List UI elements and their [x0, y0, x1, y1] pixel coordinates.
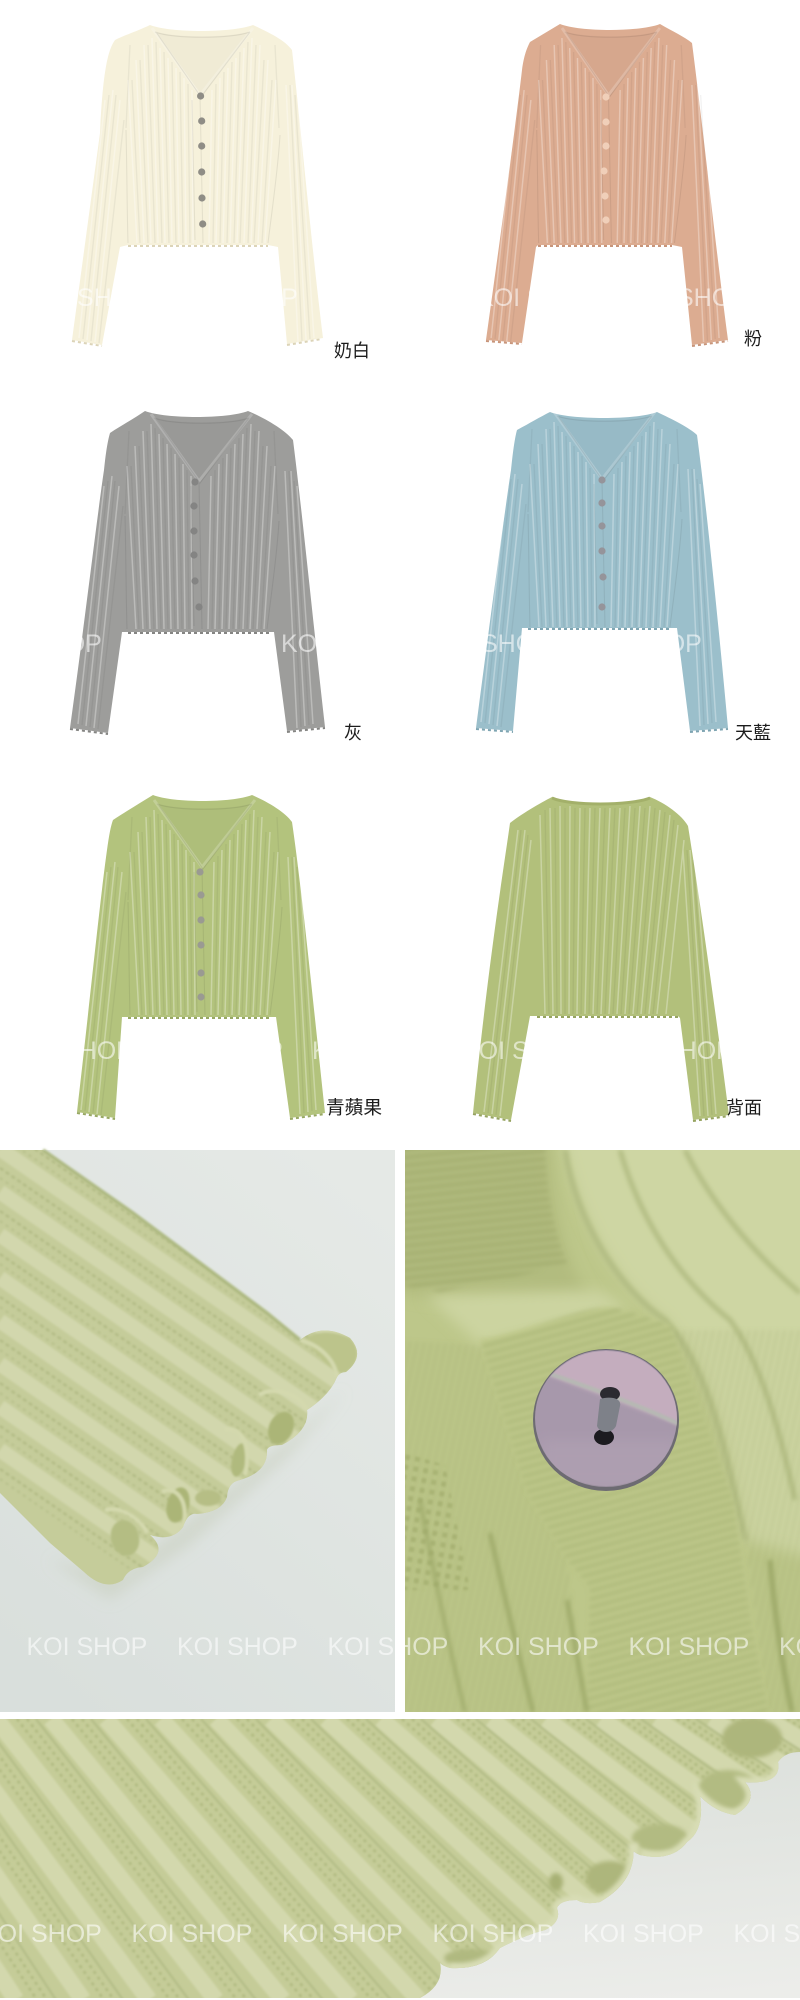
watermark: KOI SHOP rows: KOI SHOP — [612, 1037, 733, 1065]
watermark: KOI SHOP rows: KOI SHOP — [281, 630, 402, 658]
watermark: KOI SHOP rows: KOI SHOP — [282, 1920, 403, 1948]
watermark: KOI SHOP rows: KOI SHOP — [628, 1633, 749, 1661]
watermark: KOI SHOP rows: KOI SHOP — [312, 1037, 433, 1065]
watermark: KOI SHOP rows: KOI SHOP — [27, 284, 148, 312]
cardigan: sky blue — [476, 412, 728, 732]
color label: grey: 灰 — [344, 723, 362, 743]
watermark: KOI SHOP rows: KOI SHOP — [26, 1633, 147, 1661]
watermark: KOI SHOP rows: KOI SHOP — [432, 1920, 553, 1948]
watermark: KOI SHOP rows: KOI SHOP — [132, 1920, 252, 1948]
photo: sleeve cuff detail — [0, 1148, 395, 1712]
photo: button close-up — [385, 1130, 800, 1720]
cardigan: pink — [486, 24, 728, 346]
cardigan: apple green front — [77, 795, 325, 1119]
icon: shirt button — [533, 1340, 685, 1491]
color label: apple green: 青蘋果 — [326, 1097, 382, 1118]
watermark: KOI SHOP rows: KOI SHOP — [12, 1037, 133, 1065]
watermark: KOI SHOP rows: KOI SHOP — [327, 284, 448, 312]
watermark: KOI SHOP rows: KOI SHOP — [177, 284, 298, 312]
color label: back view: 背面 — [726, 1098, 762, 1118]
cuff ruffles — [105, 1332, 357, 1559]
cardigan: grey — [70, 411, 325, 734]
color label: cream: 奶白 — [334, 341, 370, 361]
watermark: KOI SHOP rows: KOI SHOP — [162, 1037, 283, 1065]
watermark: KOI SHOP rows: KOI SHOP — [177, 1633, 298, 1661]
watermark: KOI SHOP rows: KOI SHOP — [477, 284, 598, 312]
watermark: KOI SHOP rows: KOI SHOP — [627, 284, 748, 312]
watermark: KOI SHOP rows: KOI SHOP — [478, 1633, 599, 1661]
watermark: KOI SHOP rows: KOI SHOP — [431, 630, 552, 658]
cardigan: apple green back — [473, 797, 729, 1121]
watermark: KOI SHOP rows: KOI SHOP — [583, 1920, 704, 1948]
watermark: KOI SHOP rows: KOI SHOP — [462, 1037, 583, 1065]
photo: hem detail — [0, 1718, 800, 2000]
watermark: KOI SHOP rows: KOI SHOP — [131, 630, 252, 658]
watermark: KOI SHOP rows: KOI SHOP — [328, 1633, 448, 1661]
watermark: KOI SHOP rows: KOI SHOP — [581, 630, 702, 658]
cardigan: cream — [72, 25, 323, 346]
color label: sky blue: 天藍 — [735, 723, 771, 743]
color label: pink: 粉 — [744, 329, 762, 349]
